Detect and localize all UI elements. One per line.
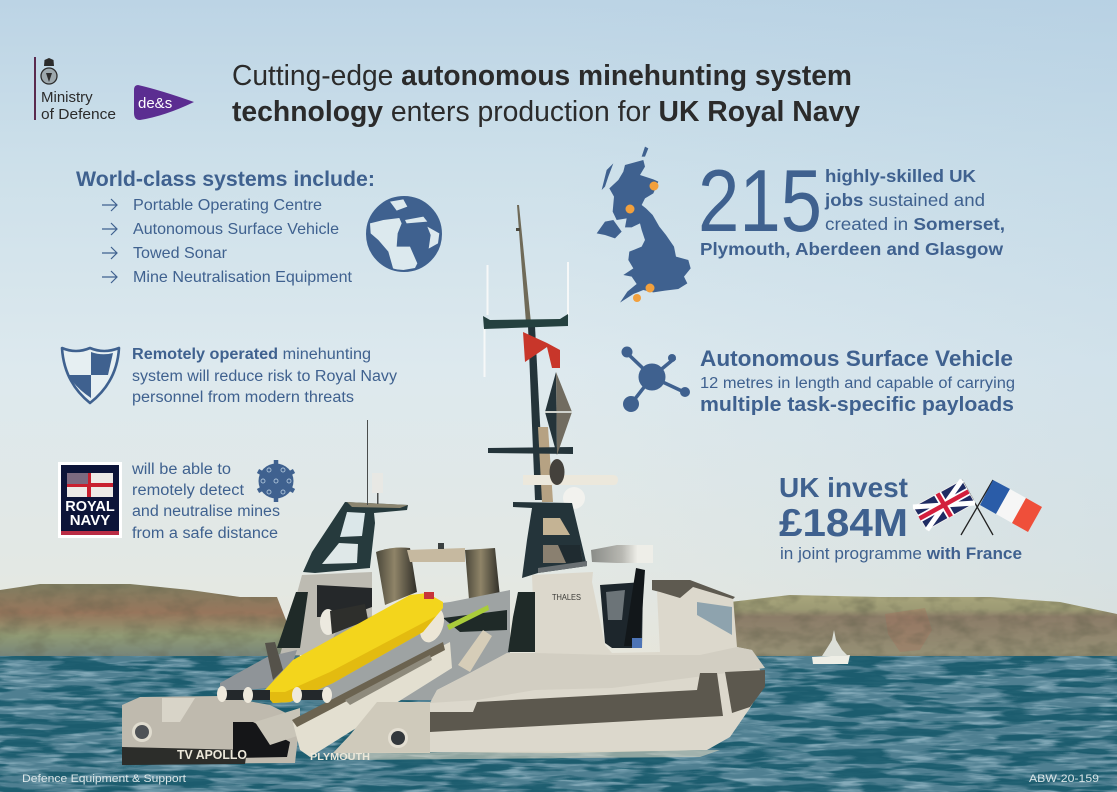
panel: royal navy [58,460,294,542]
heading: World-class systems include: [76,168,375,191]
text block [779,472,1022,563]
deck equipment [300,590,510,700]
text block: and neutralise mines [132,503,280,520]
logo: Ministry of Defence [34,57,116,123]
footer: right: ABW-20-159 [1029,773,1099,785]
logo: Ministry of Defence: of Defence [41,106,116,123]
main cabin [430,545,765,753]
text block: jobs sustained and [824,190,985,210]
text block: multiple task-specific payloads [700,394,1014,416]
text block: £184M [779,502,908,545]
text block: will be able to [131,461,231,478]
icon: sea mine [258,460,294,502]
icon: shield [62,348,119,403]
text block [700,375,1015,416]
panel: remotely operated [62,346,397,406]
panel: jobs [597,147,1005,303]
hull markings [177,592,581,763]
logo: de&s [134,85,194,120]
footer: left: Defence Equipment & Support [22,773,186,785]
text block: UK invest [779,472,908,503]
platform with hole [333,702,720,760]
title: technology enters production for UK Royal Navy [232,96,860,128]
cylinders [376,543,500,612]
title [232,60,860,128]
logo: de&s: de&s [138,95,172,112]
icon: royal navy badge: NAVY [70,512,110,529]
logo: Ministry of Defence: Ministry [41,89,93,106]
mast [483,205,618,509]
distant ship [812,630,850,664]
panel: autonomous surface vehicle [622,346,1015,416]
list of systems: Autonomous Surface Vehicle [133,221,339,238]
yellow vehicle [263,592,443,703]
rear tower [277,420,408,655]
hull markings: PLYMOUTH [310,751,370,763]
text block: remotely detect [132,482,245,499]
photo: vessel [122,205,765,765]
background hills [0,580,1117,670]
text block: personnel from modern threats [132,389,354,406]
text block: from a safe distance [132,525,278,542]
big number 215: 215 [698,151,822,250]
hull markings: TV APOLLO [177,747,247,762]
icon: royal navy badge: ROYAL [65,499,115,515]
ramp [292,642,452,757]
text block: Remotely operated minehunting [132,346,371,363]
rollers [217,686,332,703]
text block: created in Somerset, [825,214,1005,234]
text block: highly-skilled UK [825,166,976,186]
icon: crossed flags [913,480,1042,535]
text block [700,166,1005,259]
icon: royal navy badge [58,462,122,538]
French flag [980,480,1042,532]
list of systems: Portable Operating Centre [133,197,322,214]
list of systems [102,197,353,286]
panel: investment [779,472,1042,563]
text block: in joint programme with France [780,545,1022,563]
stern [122,642,300,765]
central tower [513,502,587,578]
list of systems: Mine Neutralisation Equipment [133,269,353,286]
panel: world-class systems [76,168,441,286]
title: Cutting-edge autonomous minehunting system [232,60,852,92]
icon: UK map [597,147,691,303]
text block [131,461,280,542]
background sea [0,656,1117,792]
list of systems: Towed Sonar [133,245,228,262]
UK flag [913,480,975,530]
icon: royal crest [41,58,57,84]
hull markings: THALES [552,592,581,602]
text block [132,346,397,406]
text block: 12 metres in length and capable of carrying [700,375,1015,392]
text block: Plymouth, Aberdeen and Glasgow [700,239,1003,259]
icon: globe [367,197,441,271]
icon: network [622,346,690,412]
heading: Autonomous Surface Vehicle [700,346,1013,371]
text block: system will reduce risk to Royal Navy [132,368,397,385]
